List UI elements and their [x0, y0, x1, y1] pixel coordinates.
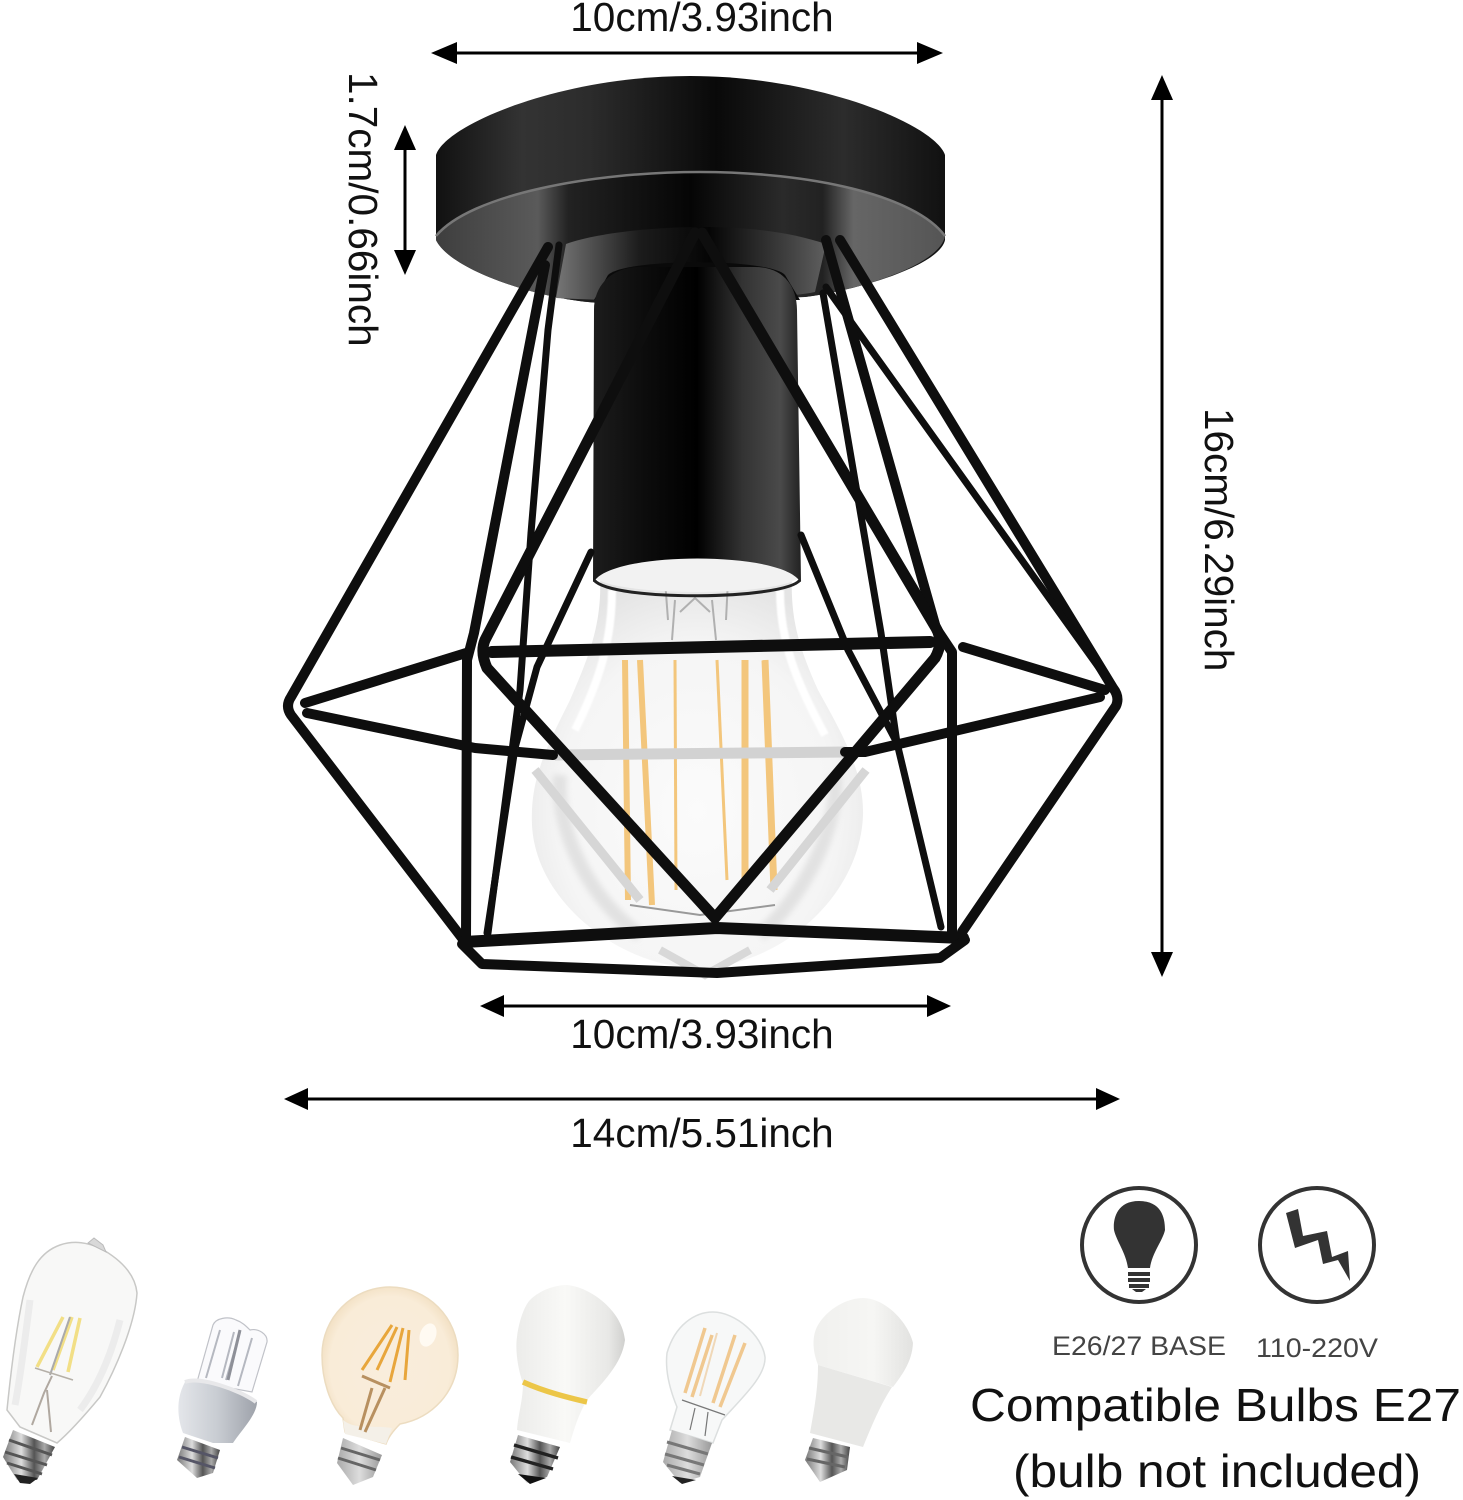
- arrow: total height: [1151, 75, 1173, 977]
- bottom ring front: [464, 928, 963, 942]
- bottom ring rear: [462, 940, 965, 973]
- arrow: top width: [431, 42, 943, 64]
- dimension: cage base width: 10cm/3.93inch: [570, 1011, 834, 1057]
- bulb: clear A-shape filament: [663, 1312, 765, 1484]
- bulb: amber globe: [322, 1287, 458, 1485]
- bulb: clear ST64 filament: [3, 1238, 137, 1484]
- bulb: compact fluorescent: [177, 1318, 267, 1478]
- front diamond: [483, 233, 940, 918]
- ceiling canopy: [436, 76, 945, 303]
- icon: voltage lightning: [1260, 1188, 1374, 1302]
- arrow: cage diameter: [284, 1088, 1120, 1110]
- horizontal ring: [492, 642, 930, 652]
- second right wire: [826, 287, 1102, 672]
- back wires: [487, 552, 591, 933]
- label: E26/27 BASE: E26/27 BASE: [1052, 1331, 1226, 1361]
- equator upper: [305, 647, 1105, 703]
- wire cage: [288, 233, 1117, 973]
- equator lower: [307, 697, 1100, 755]
- inner right wire: [826, 240, 952, 938]
- note: bulb not included: (bulb not included): [1013, 1445, 1421, 1497]
- compatible bulbs row: [3, 1238, 913, 1485]
- icon: bulb base E26/27: [1082, 1188, 1196, 1302]
- arrow: cage base width: [480, 995, 951, 1017]
- outer left wire: [288, 247, 548, 938]
- bulb: opal with yellow band: [510, 1285, 625, 1484]
- arrow: canopy height: [394, 125, 416, 275]
- inner left wire: [466, 265, 545, 940]
- dimension: canopy height: 1.7cm/0.66inch: [340, 72, 386, 347]
- label: 110-220V: 110-220V: [1256, 1333, 1378, 1363]
- lamp holder socket: [593, 262, 801, 596]
- outer right wire: [840, 240, 1117, 932]
- dimension: total height: 16cm/6.29inch: [1196, 408, 1242, 671]
- lamp illustration: [288, 76, 1117, 975]
- bulb: matte LED: [805, 1298, 913, 1482]
- dimension: cage diameter: 14cm/5.51inch: [570, 1110, 834, 1156]
- heading: compatible bulbs: Compatible Bulbs E27: [970, 1379, 1461, 1431]
- filament bulb in the socket: [532, 575, 866, 975]
